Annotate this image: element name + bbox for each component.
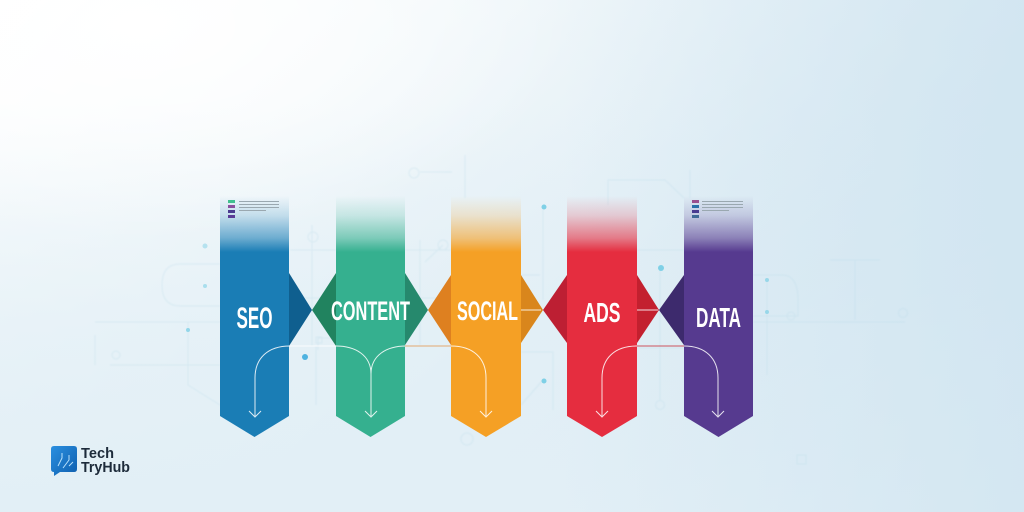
arrow: Ads to Data	[596, 346, 724, 417]
label: Content: CONTENT	[331, 296, 410, 326]
arrow: SEO to Content split	[249, 346, 371, 417]
wing: Content to Social	[405, 273, 451, 345]
mini legend: SEO column	[228, 200, 279, 218]
logo: Tech TryHub: TryHub	[81, 459, 130, 476]
label: Social: SOCIAL	[457, 296, 518, 326]
curved flow arrows	[249, 310, 724, 417]
arrow: Ads column	[567, 196, 637, 437]
icon: speech bubble chip	[51, 446, 77, 476]
wing: Ads to Data	[637, 275, 684, 345]
label: SEO: SEO	[236, 302, 272, 335]
mini legend: Data column	[692, 200, 743, 218]
connector: Social to Ads	[521, 309, 658, 311]
label: Data: DATA	[696, 302, 741, 333]
faint circuit line pattern	[95, 155, 908, 464]
circuit node dots	[186, 204, 769, 384]
arrow: Content to Social split	[365, 346, 492, 417]
wing: SEO to Content	[289, 273, 336, 346]
wing: Social to Ads	[521, 275, 567, 343]
logo: Tech TryHub	[51, 445, 130, 476]
arrow: Data column	[684, 196, 753, 437]
arrow: Content column	[331, 196, 410, 437]
coloured link lines	[405, 345, 684, 347]
wordmark: Tech	[81, 445, 114, 462]
label: Ads: ADS	[584, 297, 620, 328]
connector wings	[289, 273, 684, 346]
arrow: SEO column	[220, 196, 289, 437]
arrow: Social column	[451, 196, 521, 437]
